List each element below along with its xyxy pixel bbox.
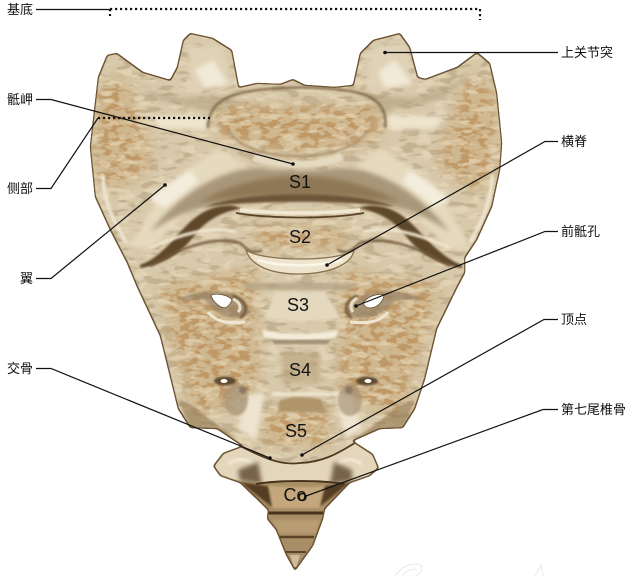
vertebra label S4: S4 [289,360,311,380]
callout: seventh coccygeal vertebra 第七尾椎骨 [299,402,626,500]
callout: anterior sacral foramen 前骶孔 [354,224,600,308]
callout: ala 翼 [20,183,167,286]
callout: base 基底: 基底 [7,2,33,17]
S2 lower crescent [246,250,354,274]
vertebra label S5: S5 [285,421,307,441]
callout: superior articular process 上关节突 [383,45,613,60]
faint watermark [395,564,543,576]
apex and cornua [215,445,377,482]
left third foramen [211,294,232,308]
third foramen shading [175,292,252,318]
wing under-edge shadows [140,206,242,268]
shadow below articular processes [142,87,236,112]
callout: seventh coccygeal vertebra 第七尾椎骨: 第七尾椎骨 [561,402,626,417]
vertebra label Co: Co [283,485,307,505]
coccyx segments [240,482,349,567]
callout: promontory 骶岬 [7,92,295,166]
left fourth foramen [220,379,228,383]
lower corners [178,400,240,440]
vertebra label S1: S1 [289,172,311,192]
callout: transverse ridge 横脊 [325,134,587,267]
S2 region [236,213,364,218]
callout: apex 顶点: 顶点 [561,312,587,327]
right fourth foramen [364,379,372,383]
callout: transverse ridge 横脊: 横脊 [561,134,587,149]
callout: coccygeal cornu 交骨: 交骨 [7,361,33,376]
vertebra label S2: S2 [289,227,311,247]
vertebra label S3: S3 [287,295,309,315]
callout: apex 顶点 [300,312,587,457]
central transverse bands [240,283,360,290]
light zones: articular processes and wings [130,42,470,250]
callout: lateral part 侧部: 侧部 [7,181,33,196]
callout: anterior sacral foramen 前骶孔: 前骶孔 [561,224,600,239]
right third foramen [363,294,384,308]
callout: ala 翼: 翼 [20,271,33,286]
fourth foramen surrounds [214,376,378,416]
sacrum bone illustration [80,25,510,575]
callout: coccygeal cornu 交骨 [7,361,272,460]
callout: promontory 骶岬: 骶岬 [7,92,33,107]
dark S1 lower band [150,168,450,232]
S1 promontory disc edge [208,88,385,128]
bone silhouette edge [90,33,502,571]
callout: superior articular process 上关节突: 上关节突 [561,45,613,60]
edge highlights on wings [103,175,126,242]
callout: lateral part 侧部 [7,118,210,196]
